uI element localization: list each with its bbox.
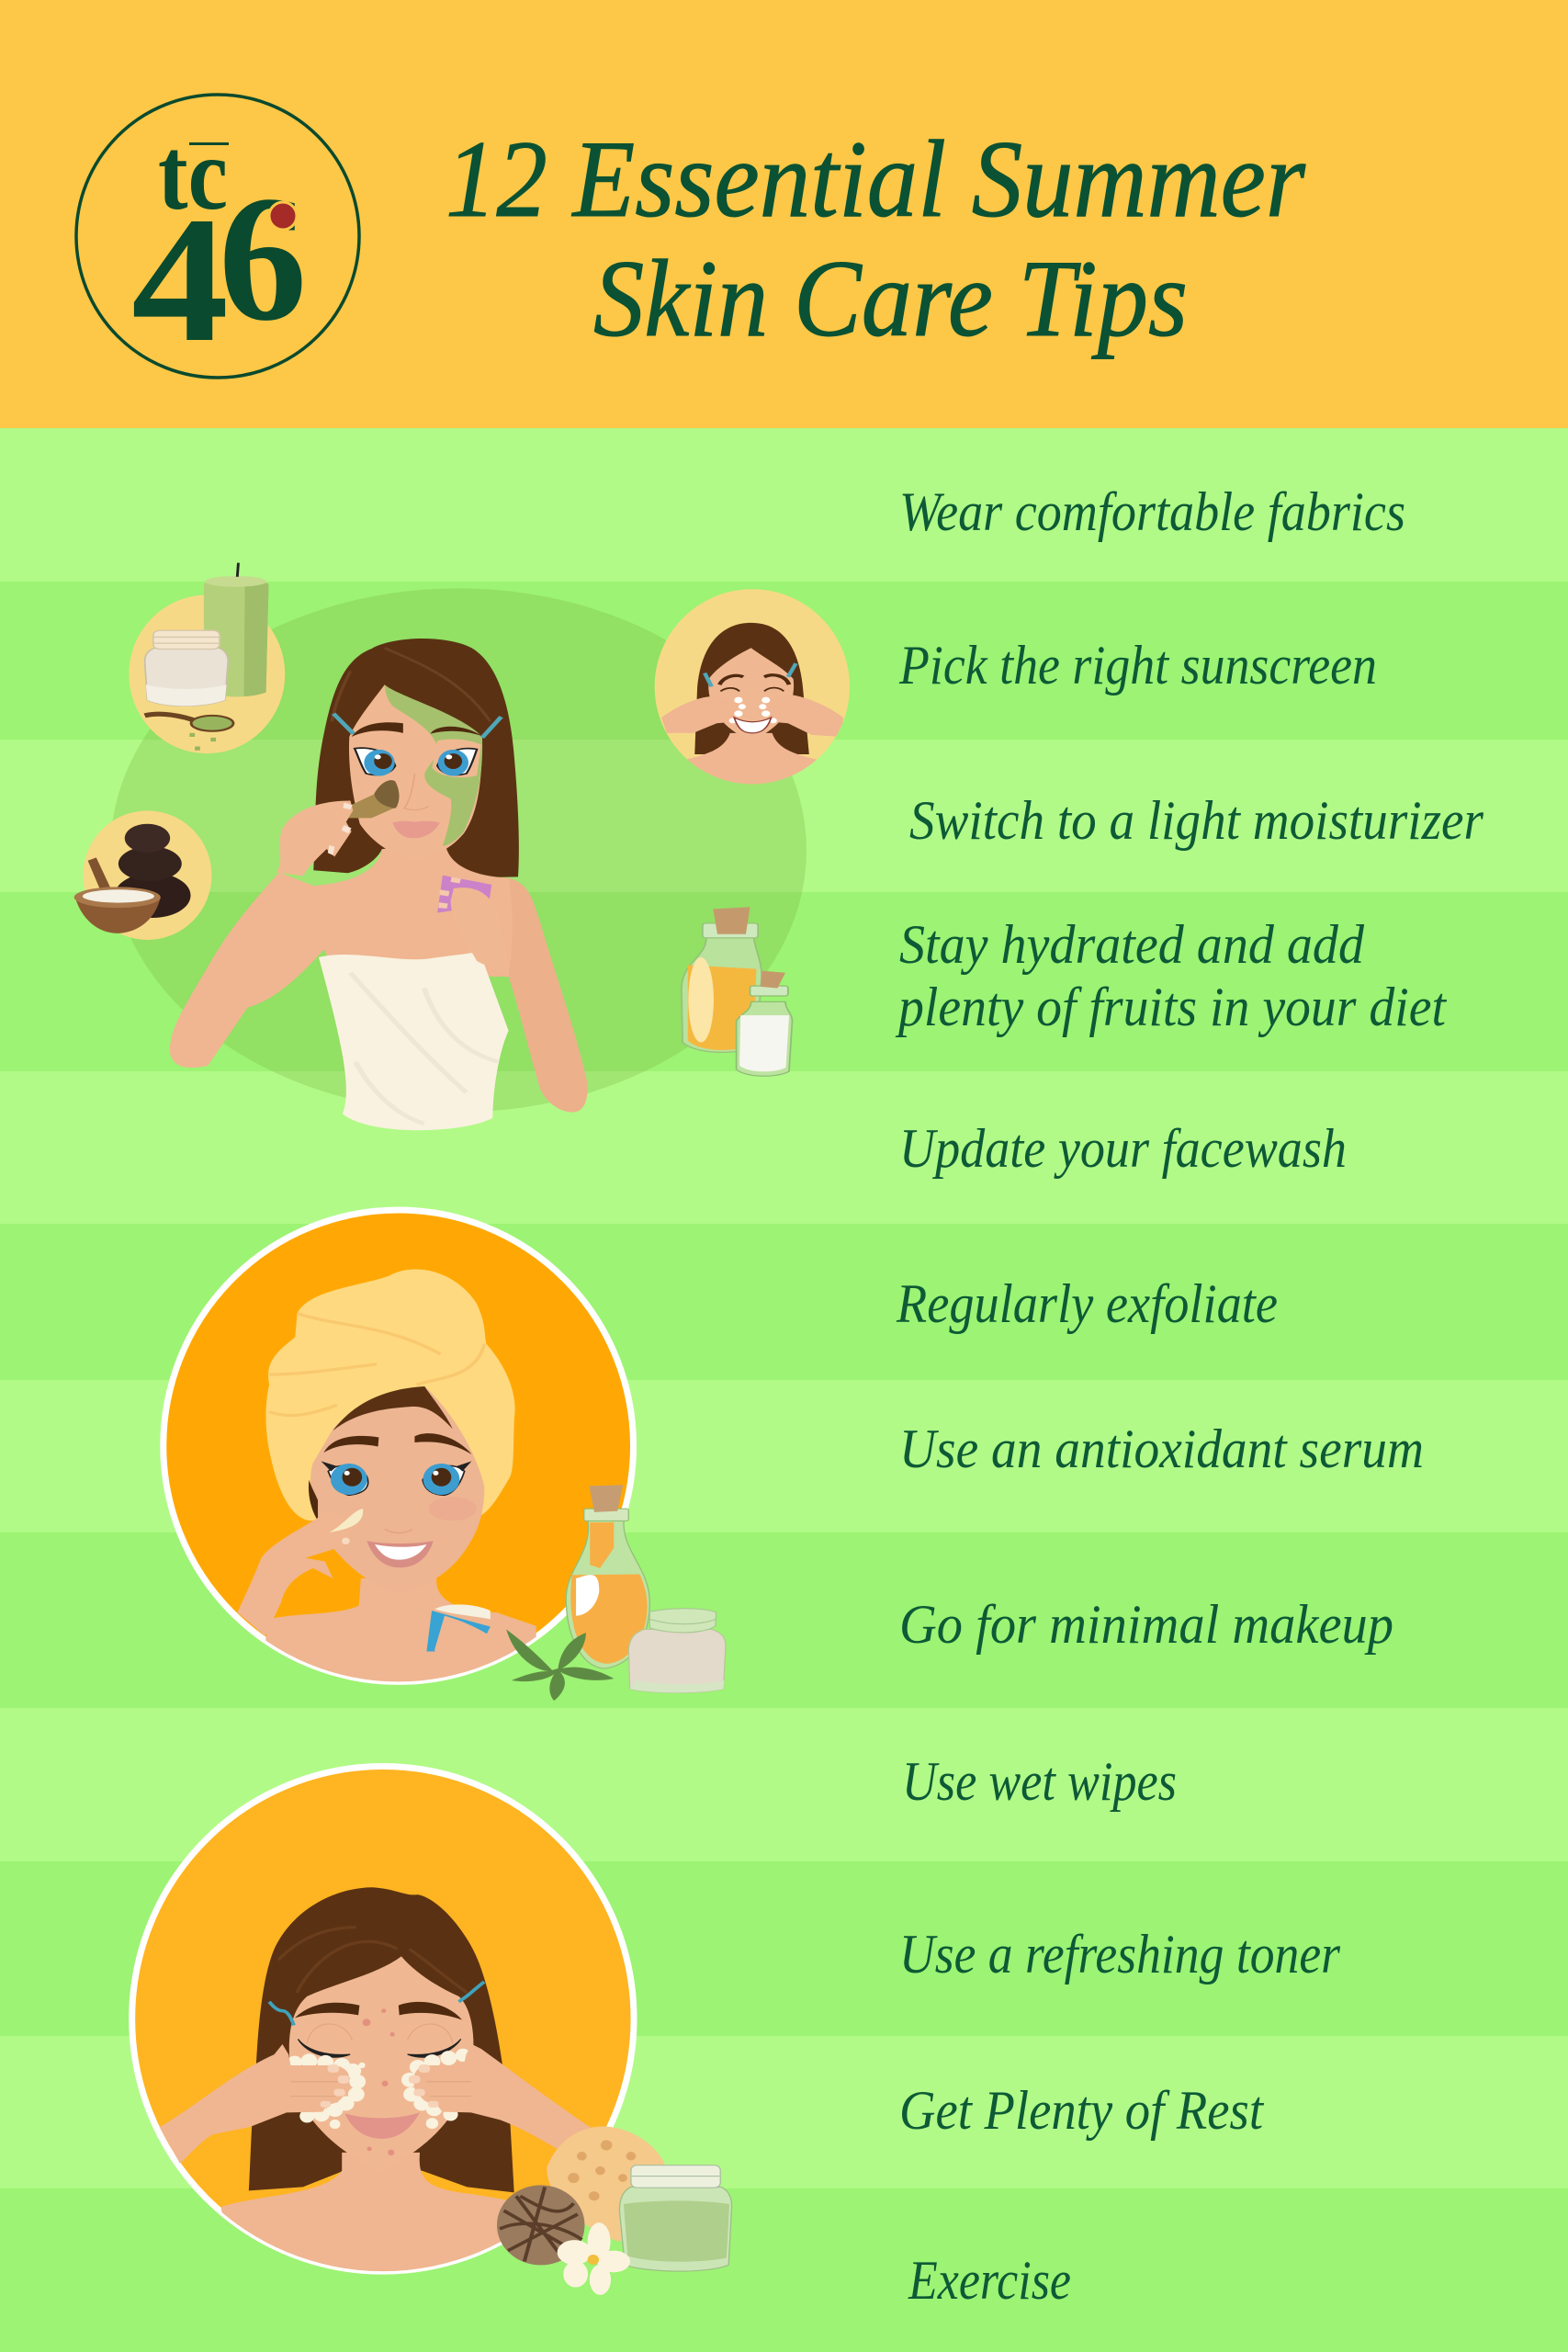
woman with hair towel xyxy=(237,1270,536,1687)
towel xyxy=(319,952,509,1130)
tip 3: Switch to a light moisturizer xyxy=(909,790,1484,851)
orange circle xyxy=(164,1210,634,1681)
logo: tc 46 xyxy=(76,95,359,379)
illustration: woman applying face mask xyxy=(74,563,850,1130)
tip 4 xyxy=(895,914,1447,1037)
tip 7: Use an antioxidant serum xyxy=(899,1419,1424,1479)
logo: tc 46: 6 xyxy=(219,159,307,358)
logo: tc 46: tc xyxy=(158,118,228,232)
jar and candle icon xyxy=(129,563,285,753)
tip 8: Go for minimal makeup xyxy=(899,1594,1393,1655)
stones and bowl icon xyxy=(74,810,211,940)
header band xyxy=(0,0,1568,428)
golden circle xyxy=(132,1767,634,2271)
illustration: woman washing face xyxy=(132,1767,732,2295)
cream jar, green xyxy=(619,2165,732,2271)
backdrop ellipse xyxy=(110,588,807,1112)
cream jar xyxy=(628,1609,726,1692)
tip 10: Use a refreshing toner xyxy=(899,1924,1341,1984)
woman washing face icon xyxy=(655,589,850,791)
tip 11: Get Plenty of Rest xyxy=(899,2080,1264,2141)
title: 12 Essential Summer xyxy=(446,118,1306,240)
tips list xyxy=(895,481,1484,2311)
woman with green mask xyxy=(170,639,588,1113)
tip 5: Update your facewash xyxy=(899,1118,1347,1179)
leaves xyxy=(506,1629,614,1701)
tip 6: Regularly exfoliate xyxy=(896,1273,1278,1334)
oil bottle xyxy=(566,1485,649,1668)
tip 12: Exercise xyxy=(908,2250,1071,2311)
sponge xyxy=(547,2126,667,2242)
oil bottles icon xyxy=(682,907,792,1076)
flower xyxy=(558,2222,630,2295)
tip 9: Use wet wipes xyxy=(902,1751,1177,1812)
illustration: woman in towel wrap applying cream xyxy=(164,1210,726,1701)
title: Skin Care Tips xyxy=(593,237,1188,359)
woman washing with foam xyxy=(160,1887,603,2276)
sponge in hand xyxy=(437,876,509,977)
tip 1: Wear comfortable fabrics xyxy=(899,481,1405,542)
title xyxy=(446,118,1306,359)
tip 4: plenty of fruits in your diet xyxy=(895,977,1447,1037)
logo: tc 46: 4 xyxy=(131,180,229,379)
woven ball xyxy=(497,2185,584,2265)
tip 4: Stay hydrated and add xyxy=(899,914,1365,975)
tip 2: Pick the right sunscreen xyxy=(898,635,1377,695)
